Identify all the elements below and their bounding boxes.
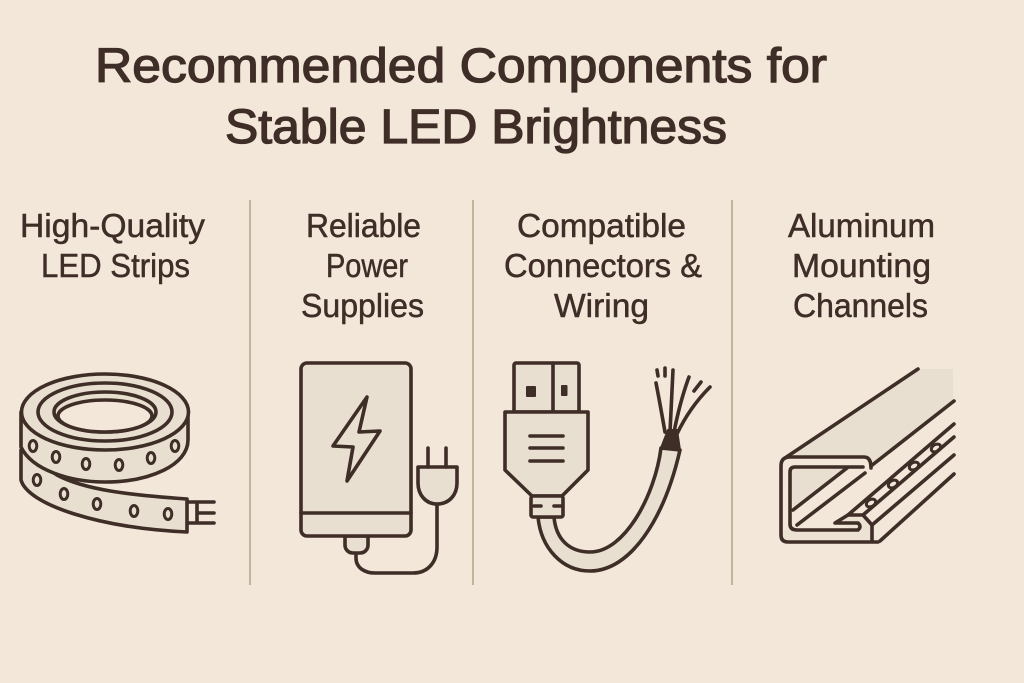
icon: power supply with plug [301,363,457,573]
heading: Reliable Power Supplies: Supplies [301,287,424,324]
heading: Compatible Connectors & Wiring: Compatible [517,207,686,244]
heading: Compatible Connectors & Wiring: Connectors & [504,247,702,284]
heading: Aluminum Mounting Channels: Mounting [792,247,931,284]
panel: connectors and wiring [504,207,710,571]
heading: Reliable Power Supplies [301,207,424,324]
heading: Reliable Power Supplies: Reliable [306,207,421,244]
heading: High-Quality LED Strips [20,207,205,284]
heading: Reliable Power Supplies: Power [326,247,408,284]
icon: LED strip coil [21,374,214,532]
heading: Aluminum Mounting Channels: Aluminum [788,207,935,244]
panel: aluminum mounting channels [781,207,954,542]
heading: High-Quality LED Strips: LED Strips [41,247,190,284]
heading: Compatible Connectors & Wiring: Wiring [554,287,649,324]
icon: USB connector with stripped wires [505,363,710,571]
icon: aluminum channel profile [781,369,954,542]
heading: Aluminum Mounting Channels: Channels [793,287,928,324]
heading: High-Quality LED Strips: High-Quality [20,207,205,244]
heading: Aluminum Mounting Channels [788,207,935,324]
title [95,40,827,154]
title: Recommended Components for [95,40,827,93]
panel: power supplies [301,207,457,573]
panel: LED strips [20,207,214,532]
title: Stable LED Brightness [225,101,727,154]
heading: Compatible Connectors & Wiring [504,207,702,324]
